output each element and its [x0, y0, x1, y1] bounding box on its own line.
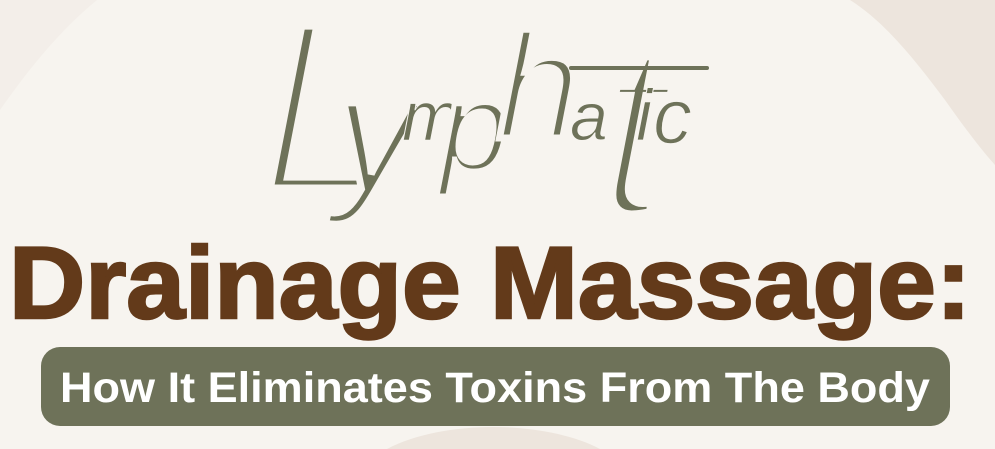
script title: Lymphatic: h: [497, 2, 580, 170]
script title: Lymphatic: y: [325, 41, 426, 225]
script title: Lymphatic: p: [436, 58, 510, 197]
script title: Lymphatic: i: [636, 76, 654, 156]
script title: Lymphatic: [258, 0, 707, 268]
script title: Lymphatic: a: [570, 79, 608, 155]
script title: Lymphatic: c: [653, 72, 692, 160]
script title: Lymphatic: m: [402, 77, 460, 155]
main heading: Drainage Massage:: [9, 226, 971, 340]
subtitle banner: How It Eliminates Toxins From The Body: [60, 364, 930, 412]
subtitle banner: [41, 347, 950, 426]
